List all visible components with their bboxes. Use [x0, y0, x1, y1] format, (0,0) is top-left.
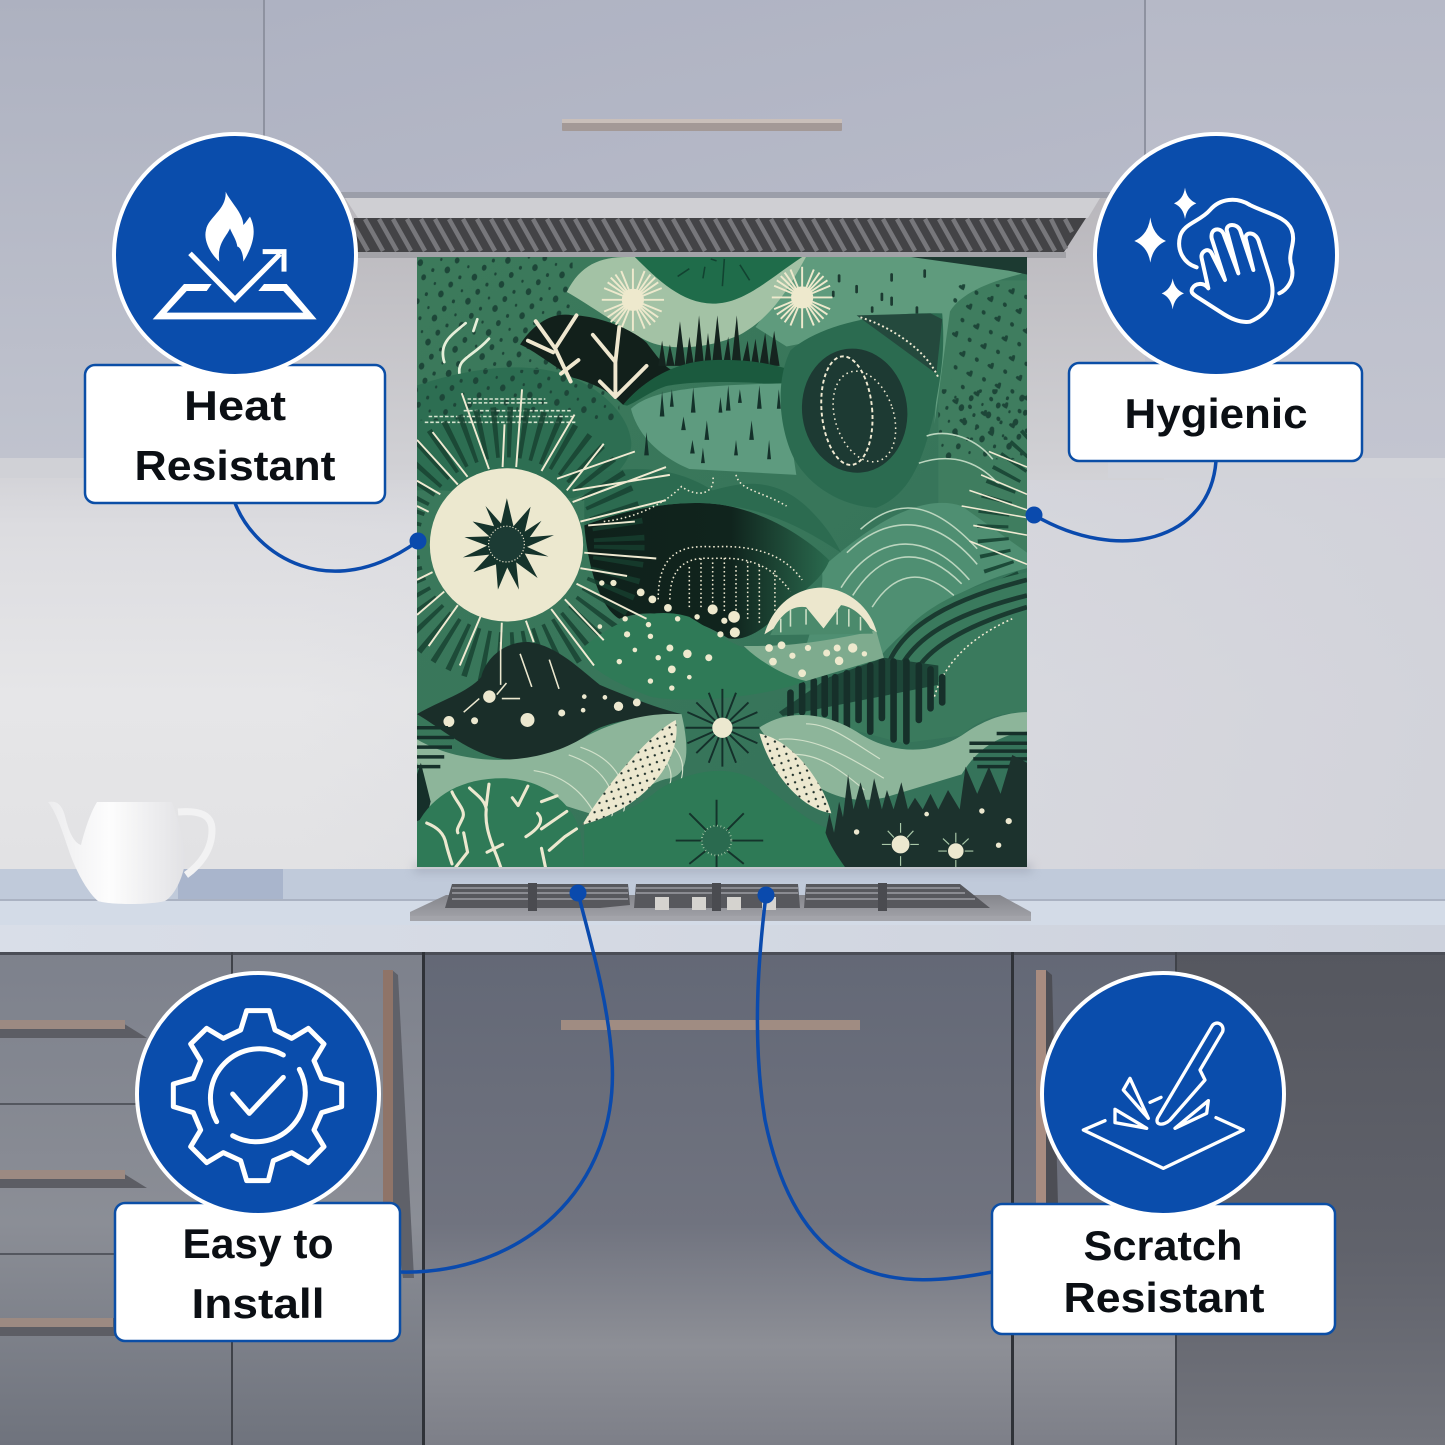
teapot — [48, 802, 212, 904]
pine forest top — [658, 315, 780, 366]
base colour — [417, 257, 1027, 867]
label box: Resistant — [1064, 1274, 1265, 1321]
squiggles top left — [443, 319, 489, 376]
callout: scratch resistant — [757, 886, 1335, 1334]
splashback panel shadow — [414, 864, 1032, 872]
right dark green edge region — [941, 417, 1027, 552]
lower cabinets — [0, 952, 1445, 1445]
light panel with rain drops — [631, 383, 796, 475]
connector line — [235, 503, 426, 571]
mid-left dark green hatch area — [417, 367, 631, 498]
dark lens shape with dots — [417, 642, 682, 760]
worktop — [0, 869, 1445, 952]
dark ringed blob — [781, 313, 943, 508]
label box: Resistant — [134, 442, 336, 489]
label box: Heat — [184, 382, 286, 429]
icon: knife scratching surface — [1042, 973, 1284, 1215]
stitch pattern far right — [969, 734, 1027, 767]
large cream sun with dark star — [430, 468, 583, 622]
central dark band — [584, 503, 829, 639]
pale band and top bowl — [567, 257, 806, 347]
dark green arc band — [623, 360, 790, 406]
label box — [992, 1204, 1335, 1334]
dotted arches in dark band — [604, 475, 802, 623]
connector line — [757, 886, 992, 1280]
callout: hygienic — [1026, 134, 1362, 541]
upper right cabinet — [1108, 0, 1445, 478]
label box: Hygienic — [1124, 390, 1308, 437]
icon: hand wiping with sparkles — [1095, 134, 1337, 376]
gas hob — [410, 883, 1031, 921]
bottom right dark forest with stars — [825, 755, 1027, 867]
pale left wave — [417, 714, 686, 817]
green dotted hill — [580, 580, 884, 700]
callout: heat resistant — [85, 134, 426, 571]
right arc line field — [806, 434, 1027, 662]
bottom centre green hill — [584, 771, 845, 867]
patterned green splashback artwork — [417, 257, 1027, 867]
cream dotted leaves — [582, 720, 831, 825]
cabinet handles — [0, 970, 1058, 1336]
bottom left blob with cream coral — [417, 778, 584, 867]
tiled backsplash wall — [0, 440, 1445, 870]
sun rays — [417, 389, 670, 685]
starburst — [685, 689, 759, 767]
icon: gear with check mark — [137, 973, 379, 1215]
upper centre cabinet — [265, 0, 1145, 198]
black hill with cream branches — [520, 315, 672, 405]
cream dome — [764, 588, 877, 635]
upper left cabinet — [0, 0, 355, 478]
label box — [85, 365, 385, 503]
connector line — [1026, 461, 1216, 541]
connector line — [400, 884, 612, 1272]
right edge radiating ticks and rays — [962, 430, 1027, 578]
upper cabinet handle — [562, 119, 842, 131]
cooker hood — [345, 198, 1100, 258]
top right light green swoosh — [755, 257, 1027, 424]
cream sunburst left — [602, 269, 664, 331]
label box: Scratch — [1084, 1222, 1242, 1269]
label box — [115, 1203, 400, 1341]
right dark arcs and forest — [779, 572, 1027, 743]
label box: Install — [192, 1280, 324, 1327]
icon: flame over surface — [114, 134, 356, 376]
label box — [1069, 363, 1362, 461]
label box: Easy to — [182, 1220, 334, 1267]
callout: easy to install — [115, 884, 612, 1341]
pale right wave — [759, 712, 1027, 800]
radiating dark ticks around sun — [394, 432, 619, 658]
cream sunburst right — [772, 267, 832, 328]
